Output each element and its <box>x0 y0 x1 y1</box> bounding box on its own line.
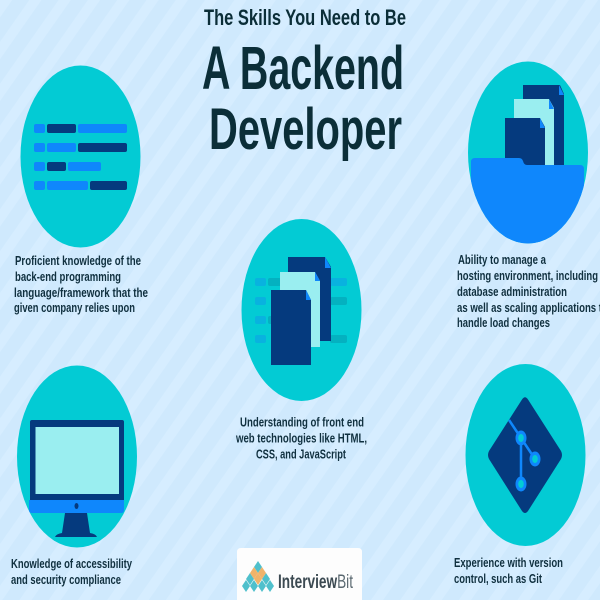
text block: version control <box>454 555 563 586</box>
icon: monitor <box>17 366 137 548</box>
text block: accessibility: Knowledge of accessibility <box>11 556 133 571</box>
icon: code lines <box>20 66 140 248</box>
panel: programming language <box>14 66 148 315</box>
text block: front end: CSS, and JavaScript <box>256 446 346 462</box>
icon: folder with documents <box>468 62 588 250</box>
text block: programming language: Proficient knowledge of the <box>15 253 141 268</box>
text block: front end <box>235 414 367 462</box>
text block: hosting: Ability to manage a <box>458 252 547 267</box>
text block: version control: control, such as Git <box>454 571 542 586</box>
text block: front end: Understanding of front end <box>240 414 364 430</box>
text block: hosting: handle load changes <box>457 315 550 330</box>
text block: programming language: given company relies upon <box>14 300 135 315</box>
panel: accessibility <box>11 366 137 587</box>
icon: documents over code <box>242 219 362 401</box>
panel: version control <box>454 364 586 586</box>
panel: front end <box>235 219 367 462</box>
text block: accessibility <box>11 556 133 587</box>
text block: accessibility: and security compliance <box>11 572 121 587</box>
logo: InterviewBit: InterviewBit <box>278 572 354 593</box>
text block: programming language: back-end programming <box>15 269 121 284</box>
logo: InterviewBit <box>237 548 362 600</box>
text block: programming language <box>14 253 148 315</box>
title: The Skills You Need to Be <box>204 5 406 30</box>
text block: version control: Experience with version <box>454 555 563 570</box>
title: A Backend <box>202 34 404 102</box>
panel: hosting <box>457 62 600 330</box>
title: Developer <box>209 97 402 162</box>
icon: git <box>466 364 586 546</box>
text block: front end: web technologies like HTML, <box>235 430 367 446</box>
text block: programming language: language/framework that the <box>14 285 148 300</box>
title <box>202 5 406 162</box>
text block: hosting <box>457 252 600 330</box>
